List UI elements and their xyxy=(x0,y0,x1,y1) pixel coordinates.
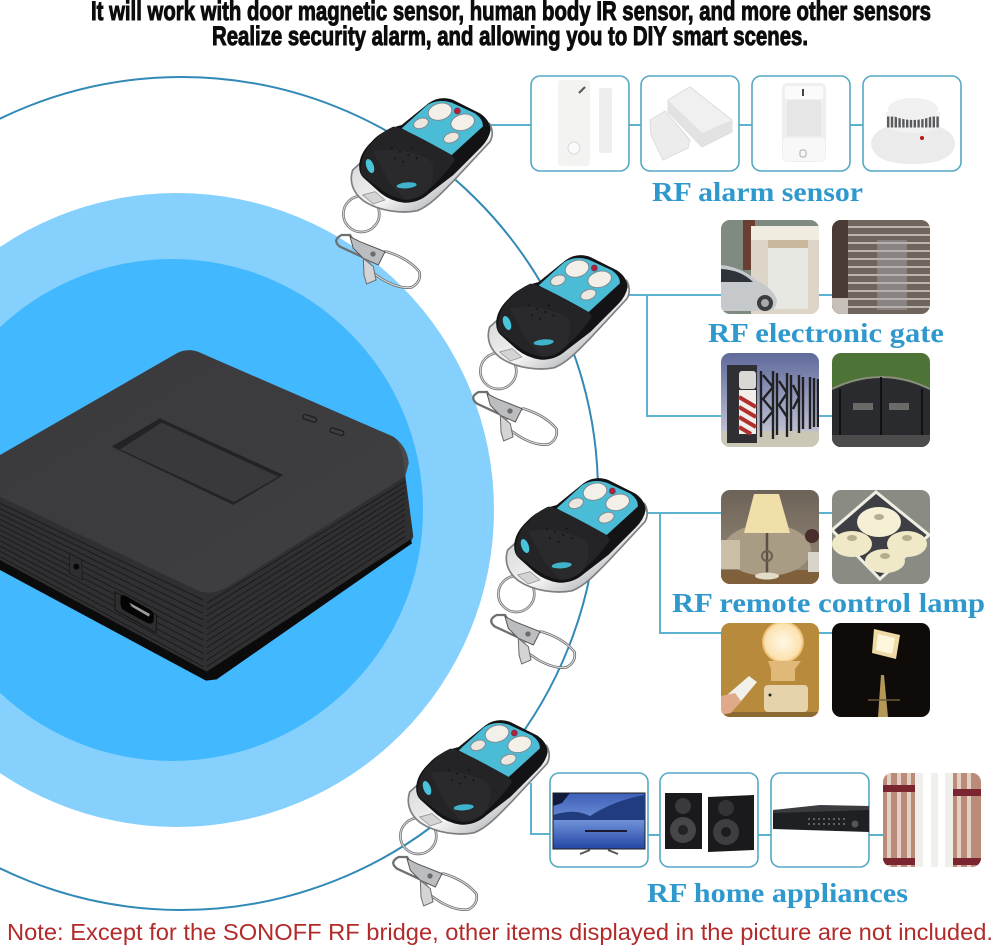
device LED indicators xyxy=(302,414,344,436)
heading: RF remote control lamp: RF remote control lamp xyxy=(672,588,985,618)
device reset hole xyxy=(69,553,82,580)
device USB port xyxy=(115,592,157,633)
remote control 2 xyxy=(473,255,629,445)
heading: RF electronic gate: RF electronic gate xyxy=(708,318,944,348)
table lamp photo xyxy=(721,490,819,584)
speakers card xyxy=(660,773,758,867)
remote control 1 xyxy=(336,98,492,288)
panel: RF alarm sensors xyxy=(531,76,961,207)
garage door photo xyxy=(721,220,819,314)
bulb with remote photo xyxy=(721,621,819,717)
dark room light photo xyxy=(832,623,930,717)
door sensor card xyxy=(531,76,629,171)
heading: RF alarm sensor: RF alarm sensor xyxy=(652,177,863,207)
television card xyxy=(550,773,648,867)
heading: RF home appliances: RF home appliances xyxy=(647,878,908,908)
smoke detector card xyxy=(863,76,961,171)
connector lines xyxy=(490,125,883,835)
IR motion sensor card xyxy=(752,76,850,171)
magnetic contact card xyxy=(641,76,739,171)
title: Realize security alarm, and allowing you to DIY smart scenes. xyxy=(212,21,808,51)
panel: RF home appliances xyxy=(550,773,981,908)
note: Note: Except for the SONOFF RF bridge, other items displayed in the picture are not included. xyxy=(7,919,993,945)
curtains photo xyxy=(883,773,981,867)
panel: RF remote control lamp xyxy=(672,490,985,717)
light blue circle xyxy=(0,193,494,827)
deep blue circle xyxy=(0,259,423,761)
retractable gate photo xyxy=(721,353,819,447)
iron gate photo xyxy=(832,353,930,447)
title xyxy=(91,0,931,51)
RF bridge device xyxy=(0,350,413,681)
remote control 3 xyxy=(491,478,647,668)
ceiling light photo xyxy=(832,490,930,584)
panel: RF electronic gate xyxy=(708,220,944,447)
DVR recorder card xyxy=(771,773,869,867)
device top label window xyxy=(112,418,283,505)
remote control 4 xyxy=(393,720,549,910)
signal range outer ring xyxy=(0,77,598,910)
roller shutter photo xyxy=(832,220,930,314)
